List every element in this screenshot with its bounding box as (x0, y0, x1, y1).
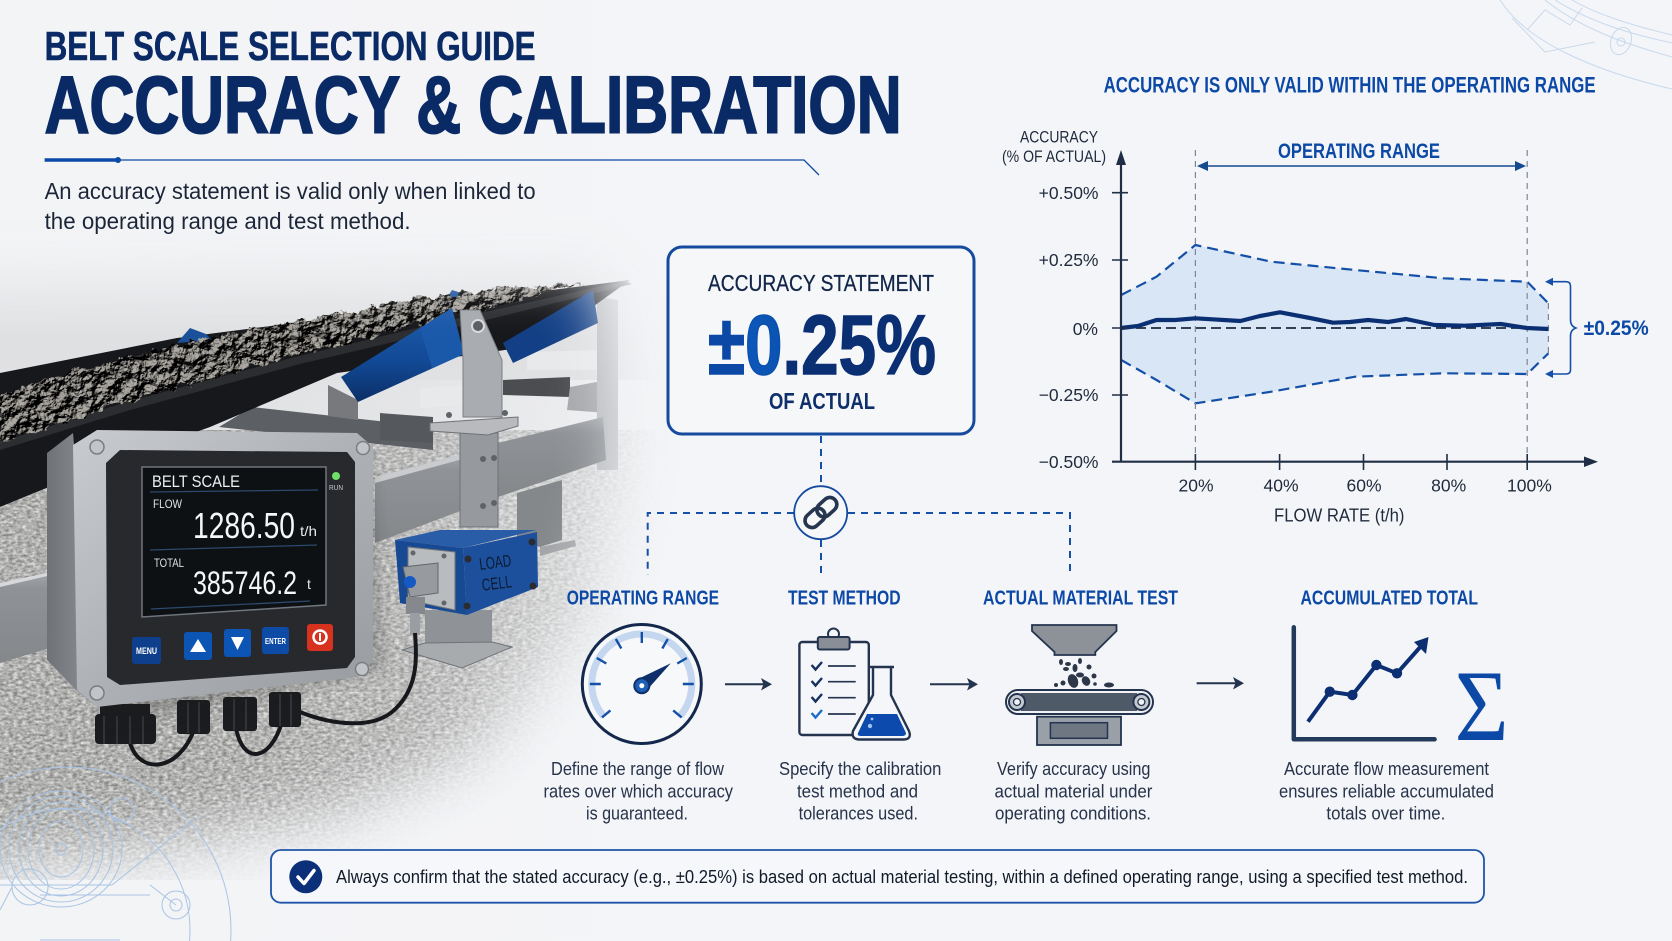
description (1279, 759, 1494, 823)
icon: chain link (794, 486, 847, 539)
arrow: step 2 to 3 (930, 678, 978, 690)
clipboard (799, 642, 869, 735)
support post (460, 433, 498, 527)
concrete floor (0, 430, 680, 880)
plate screws (410, 550, 446, 606)
step: actual material test (983, 586, 1178, 823)
axis ticks (1112, 193, 1527, 470)
subtitle (45, 178, 536, 234)
x axis (1112, 461, 1590, 463)
flow label: FLOW (153, 497, 183, 511)
tolerance bracket (1545, 278, 1576, 378)
base pedestal (425, 610, 492, 657)
measured accuracy line (1121, 312, 1548, 329)
title line 2: ACCURACY & CALIBRATION (45, 61, 902, 151)
heading: ACTUAL MATERIAL TEST (983, 586, 1178, 609)
load cell box (395, 530, 538, 635)
hopper (1032, 625, 1116, 655)
x axis labels: 100% (1507, 476, 1552, 496)
power button (307, 624, 333, 651)
step: test method (779, 586, 941, 823)
enter button: ENTER (265, 636, 286, 646)
photo backdrop haze (0, 274, 626, 430)
y axis labels: +0.25% (1039, 250, 1098, 270)
x axis labels: 20% (1178, 476, 1214, 496)
x axis labels: 40% (1263, 476, 1299, 496)
up button (184, 632, 212, 660)
subtitle: the operating range and test method. (45, 208, 411, 234)
conveyor pulleys (1009, 694, 1149, 710)
photo: conveyor background, floor and frame (0, 274, 640, 880)
blueprint: top right corner (1500, 0, 1672, 89)
rear support post (517, 297, 618, 556)
total unit: t (307, 576, 311, 592)
band upper limit (1121, 245, 1548, 303)
description (544, 759, 733, 823)
bright floor patches behind the frame (527, 351, 576, 370)
accuracy statement heading: ACCURACY STATEMENT (708, 270, 934, 296)
controller loop cables (130, 722, 282, 765)
band lower limit (1121, 353, 1548, 403)
run label: RUN (329, 485, 343, 492)
y axis title: (% OF ACTUAL) (1002, 147, 1106, 166)
flow unit: t/h (300, 523, 317, 539)
description: Verify accuracy using (997, 759, 1150, 779)
panel: belt scale controller (47, 430, 373, 707)
description: operating conditions. (995, 803, 1151, 823)
connector blue cap (404, 576, 416, 588)
load cell label: LOAD (478, 551, 512, 574)
heading: TEST METHOD (788, 586, 901, 609)
description: actual material under (994, 781, 1152, 801)
load cell label: CELL (481, 572, 513, 595)
cable glands (95, 692, 301, 744)
description: totals over time. (1326, 803, 1445, 823)
screws (90, 440, 370, 700)
conveyor (1006, 690, 1153, 714)
menu button (132, 637, 161, 664)
operating range label: OPERATING RANGE (1278, 139, 1440, 163)
heading: OPERATING RANGE (567, 586, 719, 609)
title line 1: BELT SCALE SELECTION GUIDE (45, 23, 536, 69)
liquid bubbles (868, 718, 873, 728)
callout text: Always confirm that the stated accuracy (e.g., ±0.25%) is based on actual material testing, within a defined operating range, using a specified test method. (336, 867, 1468, 887)
description: Define the range of flow (551, 759, 725, 779)
down button (224, 629, 251, 657)
menu button: MENU (136, 646, 157, 656)
panel: accuracy statement (668, 247, 974, 434)
housing front (73, 430, 373, 707)
icon: hopper and conveyor (1006, 625, 1153, 745)
base plate (402, 642, 512, 668)
step: accumulated total (1279, 586, 1509, 823)
idler bracket (460, 310, 502, 417)
icon: sigma: Σ (1455, 650, 1509, 763)
blueprint: bottom left (0, 767, 231, 941)
flask (853, 667, 910, 740)
enter button (262, 627, 289, 654)
x axis arrowhead (1584, 456, 1598, 467)
gravel load on belt (0, 283, 585, 442)
y axis (1120, 158, 1122, 462)
silver plate (408, 547, 455, 610)
accuracy value: ±0.25% (708, 298, 936, 392)
y axis labels (1039, 183, 1098, 472)
arrow: step 1 to 2 (725, 678, 772, 690)
connector body (403, 563, 438, 597)
connector stem (406, 597, 425, 614)
dashed connectors (648, 436, 1070, 575)
callout: confirm accuracy (271, 850, 1484, 903)
black face panel (106, 450, 355, 685)
of actual label: OF ACTUAL (769, 388, 875, 414)
title (45, 23, 902, 151)
y axis arrowhead (1116, 150, 1126, 165)
scale base (1037, 717, 1121, 745)
controller shadow (60, 455, 385, 725)
screen dividers (150, 490, 318, 609)
mounting flange (430, 417, 518, 435)
flask liquid (858, 714, 906, 736)
icon: clipboard and flask (799, 628, 910, 740)
flow value: 1286.50 (193, 505, 295, 546)
total label: TOTAL (154, 556, 184, 570)
screen title: BELT SCALE (152, 472, 240, 491)
subtitle: An accuracy statement is valid only when linked to (45, 178, 536, 204)
heading: ACCUMULATED TOTAL (1300, 586, 1478, 609)
clipboard clip (818, 628, 850, 650)
description (779, 759, 941, 823)
post bolts (446, 410, 508, 509)
housing side (47, 433, 97, 707)
conveyor belt body (0, 280, 632, 507)
title underline (45, 157, 819, 175)
x axis labels: 60% (1346, 476, 1382, 496)
x axis labels: 80% (1431, 476, 1466, 496)
y axis labels: +0.50% (1039, 183, 1098, 203)
icon: gauge (582, 624, 701, 744)
y axis labels: −0.25% (1039, 385, 1098, 405)
description: is guaranteed. (586, 803, 688, 823)
back frame beam (219, 377, 607, 450)
falling material (1054, 658, 1114, 689)
y axis title: ACCURACY (1020, 128, 1098, 147)
floor lightening toward the right (282, 380, 662, 802)
description: Accurate flow measurement (1284, 759, 1489, 779)
description: ensures reliable accumulated (1279, 781, 1494, 801)
icon: check circle (289, 860, 322, 893)
checklist (812, 662, 856, 718)
description (994, 759, 1152, 823)
run LED (332, 472, 340, 480)
y axis labels: −0.50% (1039, 452, 1098, 472)
tolerance band (1121, 245, 1548, 403)
x axis labels (1178, 476, 1552, 496)
main frame beams (0, 417, 606, 663)
x axis title: FLOW RATE (t/h) (1274, 506, 1404, 526)
bracket bolt (472, 320, 484, 332)
y axis labels: 0% (1073, 319, 1098, 339)
range boundary lines (1195, 150, 1548, 461)
tolerance label: ±0.25% (1584, 316, 1649, 340)
arrow: step 3 to 4 (1197, 677, 1244, 690)
description: tolerances used. (799, 803, 918, 823)
step: operating range (544, 586, 733, 823)
sensor cable (300, 633, 416, 723)
display screen (142, 467, 326, 617)
description: test method and (797, 781, 918, 801)
icon: rising chart (1294, 627, 1435, 739)
total value: 385746.2 (193, 565, 297, 601)
zero reference line (1121, 327, 1527, 329)
blue idler rollers (341, 290, 598, 402)
description: rates over which accuracy (544, 781, 733, 801)
operating range arrow (1197, 161, 1526, 171)
description: Specify the calibration (779, 759, 941, 779)
connector ferrule (410, 613, 420, 635)
line chart: accuracy vs flow rate (1002, 128, 1649, 526)
y axis title (1002, 128, 1106, 166)
